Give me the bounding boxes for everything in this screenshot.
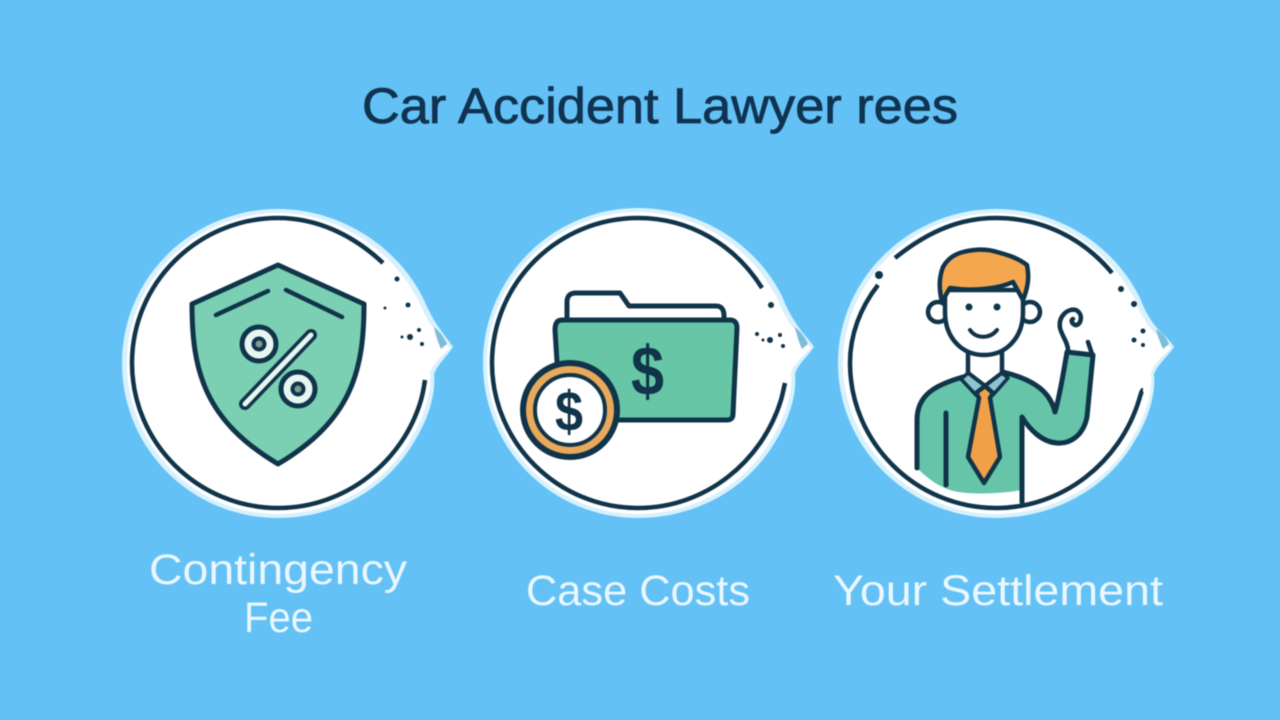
tie <box>968 386 1000 483</box>
badge: white speech circle <box>122 209 453 518</box>
icon: folder <box>555 293 737 420</box>
badge: white speech circle <box>838 209 1174 518</box>
label: contingency fee: Contingency <box>149 546 408 594</box>
shirt <box>917 352 1093 494</box>
ears <box>928 302 948 322</box>
label: contingency fee <box>149 546 408 642</box>
panel: case costs <box>483 208 814 615</box>
panel: contingency fee <box>122 209 453 642</box>
hair <box>940 250 1028 302</box>
label: case costs: Case Costs <box>526 567 750 615</box>
label: contingency fee: Fee <box>244 594 313 642</box>
eyes and smile <box>966 304 972 310</box>
label: your settlement: Your Settlement <box>833 567 1163 615</box>
hand: curled finger <box>1060 310 1092 354</box>
panel: your settlement <box>833 209 1174 615</box>
title: Car Accident Lawyer rees <box>362 78 958 134</box>
icon: dollar coin: $ <box>555 380 583 444</box>
badge: white speech circle <box>483 208 814 518</box>
icon: folder: $ <box>631 332 664 410</box>
face <box>945 290 1023 355</box>
neck and collar <box>968 352 1002 386</box>
icon: dollar coin <box>523 363 617 457</box>
icon: smiling man waving <box>917 250 1093 502</box>
icon: shield with percent <box>192 265 364 464</box>
